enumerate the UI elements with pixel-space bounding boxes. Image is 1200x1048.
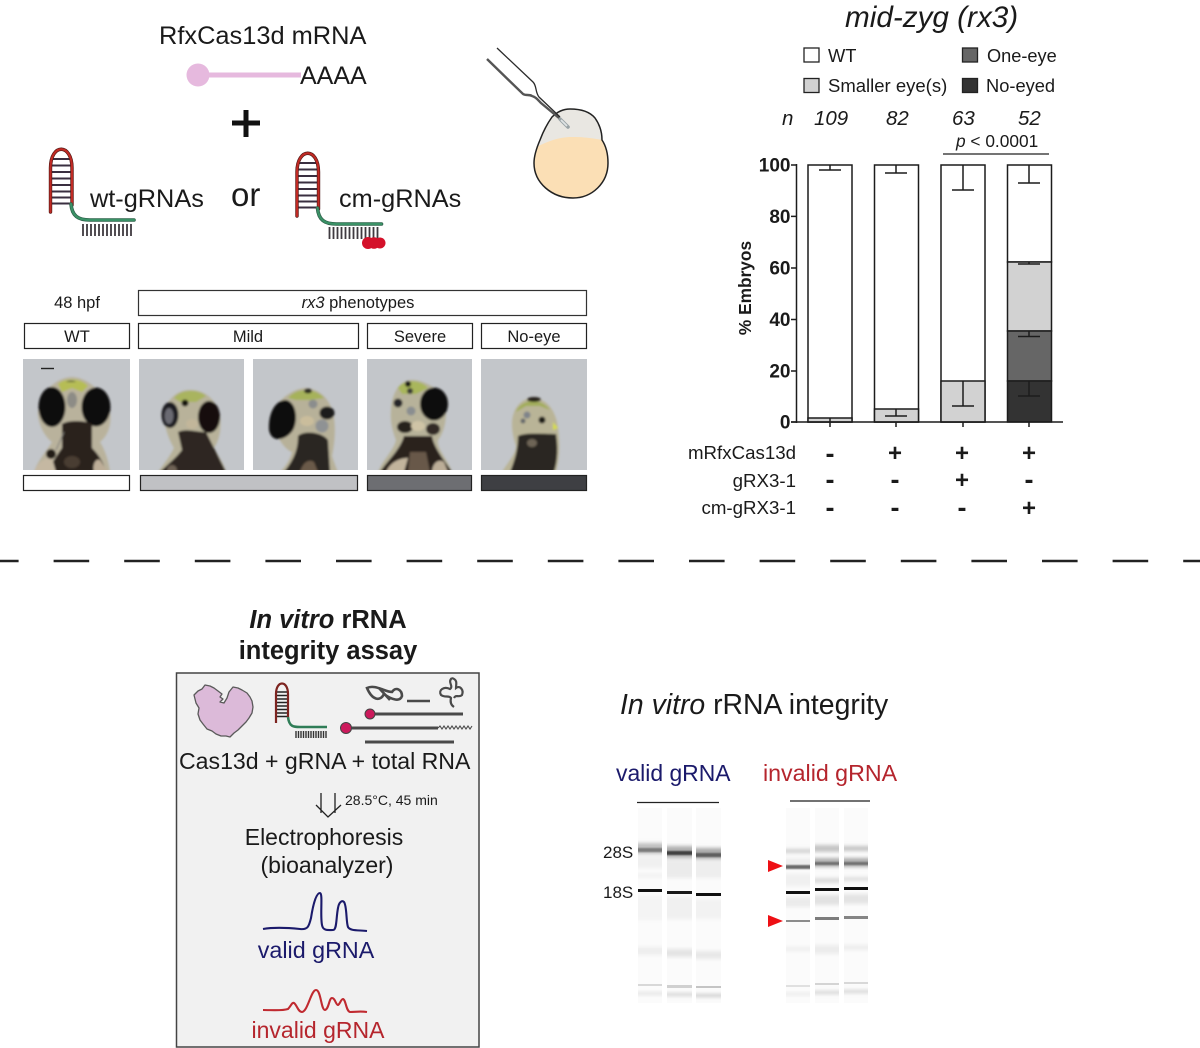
colour key bar: WT [24,476,130,490]
heading: in vitro assay: In vitro rRNA [249,606,407,634]
label: 28S: 28S [603,843,633,862]
treatment matrix of plus and minus signs: - [826,464,834,494]
gel: valid gRNA lanes [638,808,721,1003]
y axis [759,156,797,434]
label: valid gRNA gel: valid gRNA [616,760,731,786]
photo: WT larva [23,359,130,472]
chart title: mid-zyg (rx3) [845,1,1018,34]
heading: RfxCas13d mRNA: RfxCas13d mRNA [159,22,366,50]
treatment matrix of plus and minus signs [826,438,1036,522]
header box: WT: WT [64,328,90,346]
bar 1 [808,165,852,427]
arrow [316,793,341,817]
icon: mRNA with polyA tail [186,62,367,90]
label: 18S: 18S [603,883,633,902]
icon: total RNA molecules [340,678,472,742]
photo: mild phenotype larva 2 [253,359,358,472]
label: 48 hpf: 48 hpf [54,294,100,312]
treatment matrix of plus and minus signs: - [1024,464,1034,494]
icon: mRNA with polyA tail: AAAA [300,62,367,90]
label: electrophoresis [245,824,403,878]
bar 2 [874,165,918,427]
significance bracket [943,131,1049,154]
label: wt-gRNAs: wt-gRNAs [89,185,204,213]
gel bracket: invalid [790,800,870,802]
arrowhead: upper cleavage band [768,860,783,872]
photo: severe phenotype larva [367,359,472,472]
significance bracket: p < 0.0001 [955,131,1038,151]
treatment label: gRX3-1: gRX3-1 [733,470,796,491]
label: incubation: 28.5°C, 45 min [345,792,438,808]
treatment matrix of plus and minus signs: - [890,492,900,522]
lane 2 [815,808,839,1003]
label: electrophoresis: Electrophoresis [245,824,403,850]
header box: Mild: Mild [233,328,263,346]
gel bracket: valid [637,802,719,804]
plus sign [232,110,260,137]
label: electrophoresis: (bioanalyzer) [261,852,393,878]
lane 3 [844,808,868,1003]
header box: Mild [138,324,358,348]
heading: in vitro assay [239,606,418,665]
y axis: 60 [769,258,790,280]
panel: assay workflow [176,673,479,1047]
label: cm-gRNAs: cm-gRNAs [339,185,461,213]
icon: embryo being injected [487,48,612,205]
baseline [791,421,1063,423]
sample sizes row [782,107,1041,130]
photo: mild phenotype larva 1 [139,359,244,475]
photo: no-eye phenotype larva [481,359,587,472]
legend: WT [828,45,856,66]
legend [804,45,1057,96]
icon: wt-gRNA hairpin [50,149,134,236]
lane 2 [667,808,692,1003]
stacked bar chart [759,156,1063,434]
legend: No-eyed [986,75,1055,96]
header box: Severe [368,324,472,348]
label: or: or [231,176,260,213]
heading: in vitro rRNA integrity: In vitro rRNA integrity [620,689,889,721]
legend: Smaller eye(s) [828,75,947,96]
lane 3 [696,808,721,1003]
lane 1 [786,808,810,1003]
icon: cm-gRNA hairpin with chemical modifications [297,153,386,249]
treatment label: mRfxCas13d: mRfxCas13d [688,442,796,463]
treatment matrix of plus and minus signs: + [1022,440,1036,467]
legend: One-eye [987,46,1057,66]
header box: rx3 phenotypes: rx3 phenotypes [302,294,414,312]
colour key bar: Severe [368,476,472,490]
sample sizes row: 52 [1018,107,1041,130]
y axis: 40 [769,310,790,331]
label: valid gRNA: valid gRNA [258,937,375,963]
treatment matrix of plus and minus signs: + [955,467,969,494]
y axis: 20 [769,362,790,382]
scale bar [41,368,54,370]
icon: gRNA [276,684,327,738]
label: reaction mix: Cas13d + gRNA + total RNA [179,748,471,774]
treatment matrix of plus and minus signs: - [826,492,834,522]
sample sizes row: n [782,107,793,130]
treatment matrix of plus and minus signs: + [888,440,902,467]
bar 3 [941,165,985,427]
treatment matrix of plus and minus signs: + [955,440,969,467]
treatment matrix of plus and minus signs: - [890,464,900,494]
lane 1 [638,808,662,1003]
trace: invalid gRNA [263,990,367,1012]
y axis: 0 [780,412,790,434]
colour key bar: No-eye [482,476,586,490]
gel: invalid gRNA lanes [786,808,868,1003]
header box: No-eye [482,324,586,348]
y axis: 100 [759,156,790,176]
treatment matrix of plus and minus signs: - [958,492,966,522]
y axis: 80 [769,207,790,228]
header box: rx3 phenotypes [138,290,586,316]
sample sizes row: 82 [886,107,909,130]
header box: WT [24,324,130,348]
treatment matrix of plus and minus signs: + [1022,495,1036,522]
y axis title: % Embryos [735,241,755,335]
label: invalid gRNA gel: invalid gRNA [763,760,898,786]
heading: in vitro assay: integrity assay [239,637,418,665]
icon: Cas13d protein [194,685,253,737]
treatment label: cm-gRX3-1: cm-gRX3-1 [702,497,796,518]
treatment matrix of plus and minus signs: - [826,438,834,468]
header box: No-eye: No-eye [507,328,561,346]
arrowhead: lower cleavage band [768,915,783,927]
header box: Severe: Severe [394,328,446,346]
colour key bar: Mild [140,476,358,490]
bar 4 [1008,165,1052,427]
sample sizes row: 109 [814,107,848,130]
trace: valid gRNA [263,893,367,931]
sample sizes row: 63 [952,107,975,130]
label: invalid gRNA: invalid gRNA [252,1017,385,1043]
